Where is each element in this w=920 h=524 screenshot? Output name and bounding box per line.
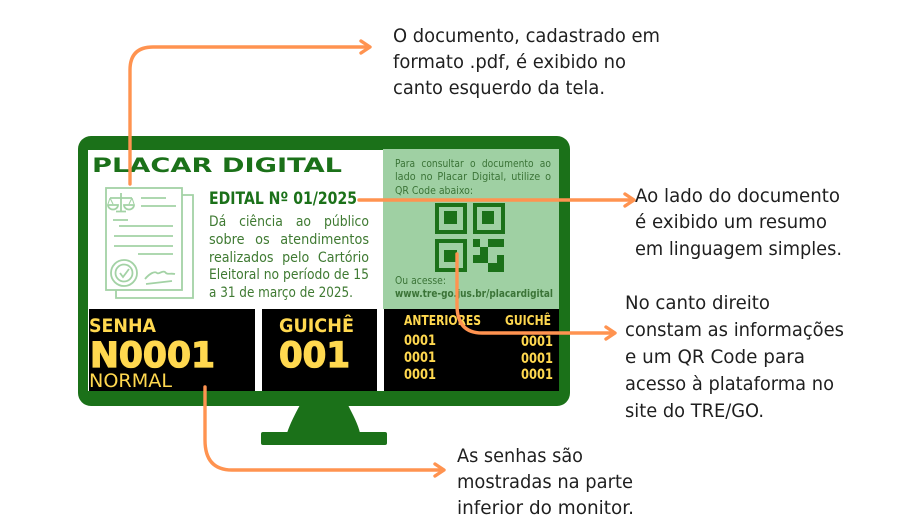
caption: document: formato .pdf, é exibido no xyxy=(393,52,626,73)
caption: document xyxy=(393,26,660,99)
caption: summary xyxy=(635,186,842,260)
caption: QR code: e um QR Code para xyxy=(625,347,805,368)
table rows xyxy=(404,333,553,383)
summary text: sobre os atendimentos xyxy=(209,232,369,248)
table rows: 0001 xyxy=(404,367,436,383)
screen xyxy=(88,150,559,309)
table rows: 0001 xyxy=(521,367,553,383)
panel: password xyxy=(88,309,559,392)
QR footer text: www.tre-go.jus.br/placardigital xyxy=(395,287,553,300)
arrow: QR code to caption xyxy=(457,254,615,339)
panel: QR code info xyxy=(383,149,559,309)
table rows: 0001 xyxy=(521,334,553,350)
caption: passwords xyxy=(457,446,634,519)
panel: previous calls xyxy=(384,309,559,391)
panel: counter xyxy=(262,309,377,391)
table rows: 0001 xyxy=(404,350,436,366)
summary text: Dá ciência ao público xyxy=(209,214,369,230)
number: N0001: N0001 xyxy=(90,336,215,376)
icon: QR code xyxy=(435,203,505,272)
QR instructions: QR Code abaixo: xyxy=(395,184,473,197)
heading: edital: EDITAL Nº 01/2025 xyxy=(209,189,357,209)
caption: passwords: mostradas na parte xyxy=(457,472,633,493)
caption: QR code: site do TRE/GO. xyxy=(625,401,764,422)
arrow: document to caption xyxy=(130,41,370,184)
QR instructions: Para consultar o documento ao xyxy=(395,157,551,170)
arrow: summary to caption xyxy=(359,194,634,206)
heading: placar digital: PLACAR DIGITAL xyxy=(92,154,342,177)
caption: document: canto esquerdo da tela. xyxy=(393,78,605,99)
caption: QR code: acesso à plataforma no xyxy=(625,374,834,395)
label: normal: NORMAL xyxy=(89,370,172,392)
caption: QR code: No canto direito xyxy=(625,293,770,314)
table rows: 0001 xyxy=(404,333,436,349)
table headers: ANTERIORES xyxy=(404,314,481,329)
table rows: 0001 xyxy=(521,351,553,367)
caption: passwords: As senhas são xyxy=(457,446,583,467)
QR instructions: lado no Placar Digital, utilize o xyxy=(395,170,551,183)
QR footer text xyxy=(395,274,553,300)
caption: QR code: constam as informações xyxy=(625,320,844,341)
panel: document summary xyxy=(92,154,369,301)
icon: document xyxy=(106,188,193,298)
summary text: a 31 de março de 2025. xyxy=(209,285,353,301)
label: guiche: GUICHÊ xyxy=(279,315,354,337)
number: 001: 001 xyxy=(279,336,350,376)
caption: passwords: inferior do monitor. xyxy=(457,498,634,519)
monitor frame xyxy=(78,136,570,406)
QR instructions xyxy=(395,157,551,197)
caption: QR code xyxy=(625,293,844,422)
monitor stand xyxy=(261,405,387,445)
summary text: Eleitoral no período de 15 xyxy=(209,267,369,283)
label: senha: SENHA xyxy=(89,316,157,337)
caption: summary: em linguagem simples. xyxy=(635,239,842,260)
summary text: realizados pelo Cartório xyxy=(209,250,369,266)
QR footer text: Ou acesse: xyxy=(395,274,446,287)
caption: document: O documento, cadastrado em xyxy=(393,26,660,47)
summary text xyxy=(209,214,369,301)
monitor xyxy=(78,136,570,445)
caption: summary: é exibido um resumo xyxy=(635,212,827,233)
caption: summary: Ao lado do documento xyxy=(635,186,840,207)
table headers xyxy=(404,313,551,329)
table headers: GUICHÊ xyxy=(505,313,551,329)
arrow: password to caption xyxy=(205,387,444,476)
